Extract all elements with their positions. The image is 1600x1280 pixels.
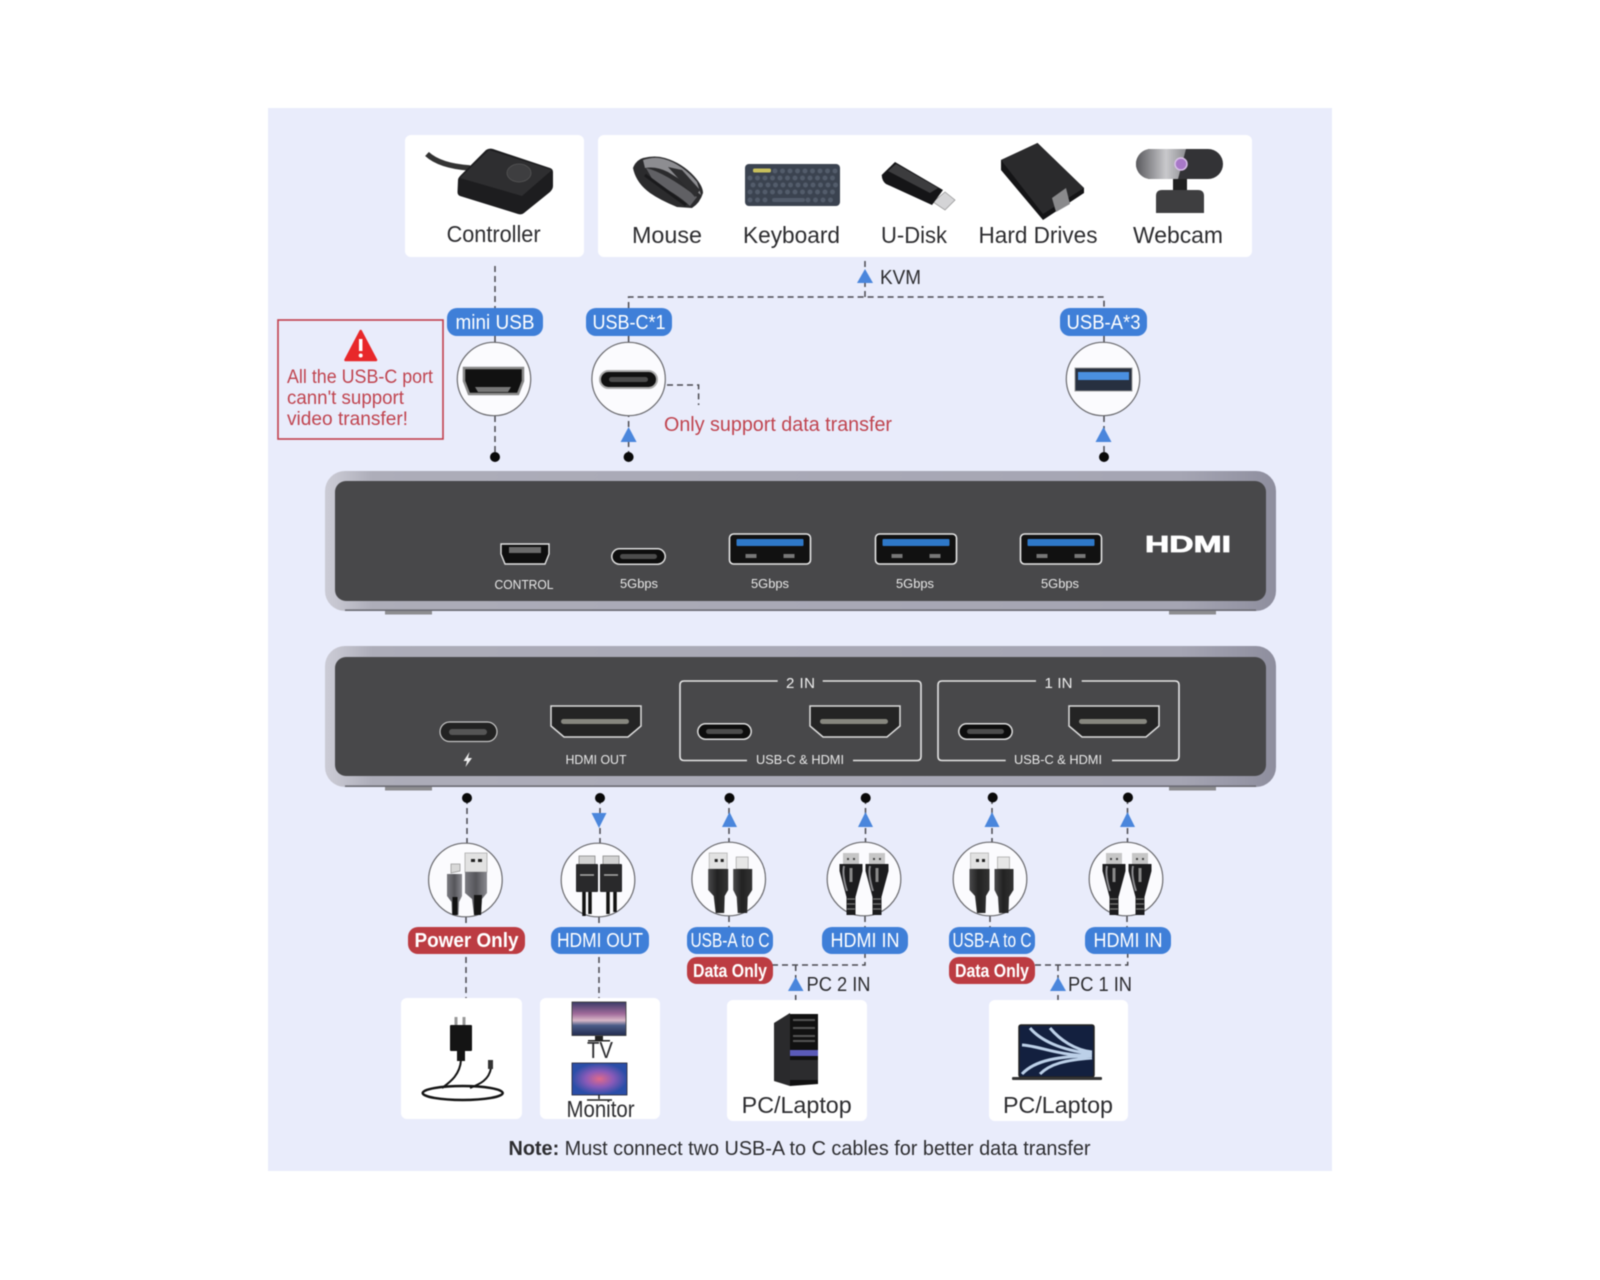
label: webcam: Webcam	[1133, 222, 1223, 248]
arrow and label: PC 2 IN: PC 2 IN	[806, 974, 870, 996]
panel: display card	[540, 998, 660, 1122]
label: TV: TV	[587, 1037, 614, 1063]
panel: laptop card	[989, 1000, 1128, 1121]
arrow: USB-C up	[621, 427, 637, 442]
cable circle: USB-A to C 1	[953, 842, 1027, 916]
arrow: HDMI out down	[592, 813, 606, 828]
icon: laptop	[1012, 1025, 1102, 1080]
port: HDMI 1	[1069, 706, 1159, 737]
port: USB-A 2	[876, 534, 956, 564]
label: 2 IN: 2 IN	[786, 675, 815, 692]
arrow: USB-A 1 up	[984, 812, 1000, 827]
panel: controller card	[405, 135, 584, 257]
pill: Data Only 1: Data Only	[955, 961, 1029, 981]
icon: mouse	[633, 156, 703, 208]
label: 5Gbps USB-A 3: 5Gbps	[1041, 576, 1079, 591]
icon: warning triangle	[346, 331, 376, 360]
arrow: USB-A up	[1096, 427, 1112, 442]
group: 1 IN	[938, 675, 1179, 767]
panel: top device bar	[325, 471, 1276, 614]
pill: USB-A to C 1	[949, 927, 1035, 954]
label: keyboard: Keyboard	[743, 222, 840, 248]
port circle: USB-C	[592, 342, 665, 416]
pill: mini USB: mini USB	[456, 312, 534, 334]
cable circle: USB-A to C 2	[692, 842, 766, 916]
port: HDMI out	[551, 706, 641, 737]
icon: power bolt	[464, 752, 472, 767]
label: PC/Laptop: PC/Laptop	[1003, 1092, 1113, 1118]
warning text: video transfer!	[287, 409, 408, 430]
pill: USB-A*3: USB-A*3	[1066, 312, 1140, 334]
port: USB-A 1	[730, 534, 810, 564]
icon: monitor	[572, 1063, 627, 1100]
note: only support data transfer: Only support data transfer	[664, 414, 892, 436]
label: 5Gbps USB-A 2: 5Gbps	[896, 576, 934, 591]
arrow and label: KVM	[857, 267, 921, 289]
pill: HDMI IN 1: HDMI IN	[1094, 930, 1162, 952]
label: USB-C and HDMI 2: USB-C & HDMI	[756, 752, 844, 767]
pill: USB-C*1: USB-C*1	[592, 312, 666, 334]
pill: USB-A to C 1: USB-A to C	[952, 930, 1032, 952]
label: 1 IN: 1 IN	[1044, 675, 1072, 692]
background panel	[268, 108, 1332, 1171]
logo: HDMI: HDMI	[1145, 531, 1231, 557]
dots: top connectors	[490, 452, 1109, 462]
icon: controller	[427, 149, 553, 214]
group: 2 IN	[680, 675, 921, 767]
port: USB-C 5Gbps	[612, 549, 665, 564]
label: HDMI OUT: HDMI OUT	[566, 752, 627, 767]
label: hard drives: Hard Drives	[978, 222, 1098, 248]
label: 5Gbps USB-C: 5Gbps	[620, 576, 658, 591]
port: mini USB control	[501, 544, 549, 564]
port: HDMI 2	[810, 706, 900, 737]
icon: power adapter	[423, 1017, 503, 1100]
label: u-disk: U-Disk	[881, 222, 947, 248]
label: controller: Controller	[447, 221, 541, 247]
pill: HDMI OUT: HDMI OUT	[557, 930, 643, 952]
icon: PC tower	[774, 1013, 818, 1086]
pill: Data Only 1	[949, 957, 1035, 984]
arrow: HDMI 2 up	[858, 812, 873, 827]
connector lines	[466, 257, 1128, 1000]
port: USB-C 1	[959, 724, 1012, 739]
label: 5Gbps USB-A 1: 5Gbps	[751, 576, 789, 591]
label: PC/Laptop: PC/Laptop	[742, 1092, 852, 1118]
label: CONTROL: CONTROL	[494, 577, 554, 592]
pill: Power Only: Power Only	[414, 930, 519, 952]
arrow: USB-A 2 up	[722, 812, 737, 827]
note: Note: Must connect two USB-A to C cables for better data transfer	[508, 1138, 1091, 1160]
port: USB-A 3	[1020, 534, 1102, 564]
port: USB-C 2	[698, 724, 751, 739]
pill: USB-A to C 2	[687, 927, 773, 954]
panel: PC card	[727, 1000, 867, 1121]
label: Monitor: Monitor	[566, 1096, 635, 1122]
port circle: mini USB	[457, 342, 531, 416]
port: USB-C power	[440, 722, 497, 742]
port circle: USB-A	[1066, 342, 1140, 416]
warning text: All the USB-C port	[287, 367, 434, 388]
cable circle: HDMI out	[561, 843, 635, 917]
arrow and label: KVM: KVM	[880, 267, 921, 289]
cable circle: power	[429, 843, 502, 917]
icon: keyboard	[745, 164, 840, 206]
panel: peripherals card	[598, 135, 1252, 257]
arrow: HDMI 1 up	[1120, 812, 1135, 827]
warning text: cann't support	[287, 388, 405, 409]
icon: webcam	[1136, 149, 1223, 213]
panel: power adapter card	[401, 998, 522, 1119]
pill: USB-A to C 2: USB-A to C	[690, 930, 770, 952]
icon: u-disk	[882, 162, 955, 210]
icon: hard drive	[1001, 143, 1084, 220]
label: mouse: Mouse	[632, 222, 702, 248]
icon: TV	[572, 1002, 626, 1042]
pill: Data Only 2: Data Only	[693, 961, 767, 981]
cable circle: HDMI in 1	[1089, 842, 1163, 916]
panel: bottom device bar	[325, 646, 1276, 790]
callout: USB-C warning	[278, 320, 443, 439]
pill: Data Only 2	[687, 957, 773, 984]
label: USB-C and HDMI 1: USB-C & HDMI	[1014, 752, 1102, 767]
pill: mini USB	[447, 308, 543, 336]
dots: bottom connectors	[462, 792, 1133, 803]
cable circle: HDMI in 2	[827, 842, 901, 916]
pill: HDMI IN 2: HDMI IN	[830, 930, 900, 952]
arrow and label: PC 1 IN: PC 1 IN	[1068, 974, 1132, 996]
